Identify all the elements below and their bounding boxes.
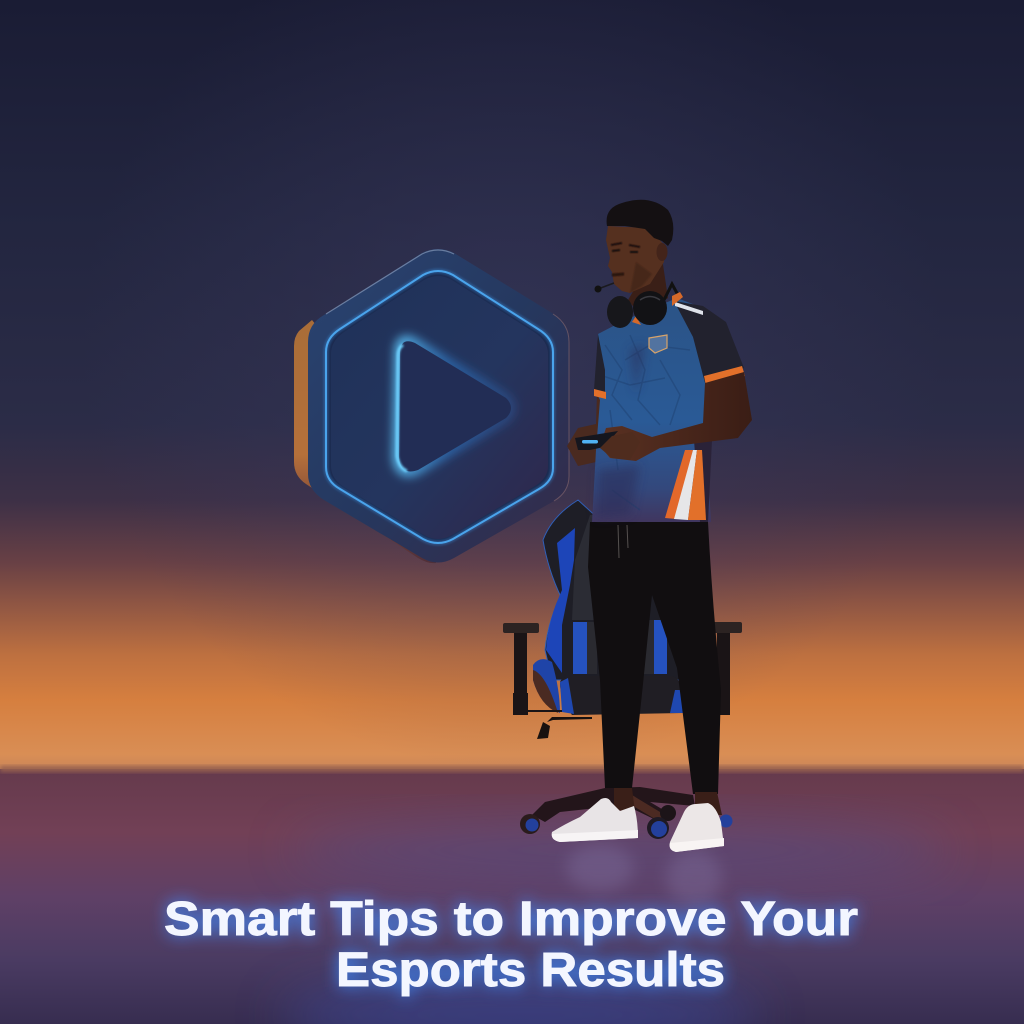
hexagon right rim — [553, 314, 569, 501]
face — [606, 226, 664, 293]
icon: hexagonal play button — [294, 249, 569, 563]
left forearm — [567, 394, 606, 466]
chair seat — [560, 676, 683, 715]
ankles — [614, 788, 722, 815]
jersey dark patch — [596, 345, 645, 518]
chair base — [520, 787, 732, 839]
title glow: Smart Tips to Improve Your — [164, 893, 858, 946]
headphones — [607, 284, 683, 328]
hexagon inner panel — [331, 276, 548, 539]
background: dusk wall gradient — [0, 0, 1024, 770]
chair lumbar panels — [573, 620, 667, 674]
chair blue strip — [546, 528, 575, 673]
hexagon front plate — [308, 249, 569, 562]
hexagon neon line — [326, 271, 553, 543]
trousers — [588, 522, 721, 794]
left armrest — [503, 623, 562, 715]
drawstrings — [618, 525, 628, 558]
floor — [0, 766, 1024, 1024]
title glow: Esports Results — [336, 944, 725, 997]
game controller — [575, 431, 618, 450]
collar stripe — [675, 302, 703, 315]
neck — [628, 258, 668, 315]
play edge light — [397, 345, 407, 471]
hair — [607, 200, 673, 246]
title text — [164, 893, 858, 997]
chair lever — [537, 717, 592, 739]
hexagon top highlight — [326, 250, 454, 314]
jersey side panel — [694, 440, 712, 522]
left shoe — [552, 798, 638, 842]
jersey torso — [592, 298, 712, 522]
chair side bolster — [533, 659, 560, 713]
title text: Smart Tips to Improve Your — [164, 893, 858, 946]
gaming chair — [503, 500, 742, 839]
play triangle — [399, 341, 511, 472]
person: gamer — [552, 200, 752, 852]
chair backrest — [543, 500, 690, 680]
play triangle glow — [398, 341, 510, 472]
jersey sleeves — [674, 301, 744, 383]
headset microphone — [594, 283, 614, 292]
hexagon inner gutter — [326, 271, 553, 543]
title glow — [164, 893, 858, 997]
title — [164, 893, 858, 997]
ear — [656, 243, 668, 261]
right arm — [600, 372, 752, 461]
jersey crest — [649, 335, 667, 353]
jersey side stripes — [665, 450, 693, 519]
hand over controller — [600, 432, 640, 460]
title text: Esports Results — [336, 944, 725, 997]
jersey pattern — [600, 335, 690, 510]
right shoe — [670, 803, 724, 852]
facial features — [611, 243, 652, 293]
right armrest — [712, 622, 742, 715]
hexagon copper side — [294, 320, 436, 563]
